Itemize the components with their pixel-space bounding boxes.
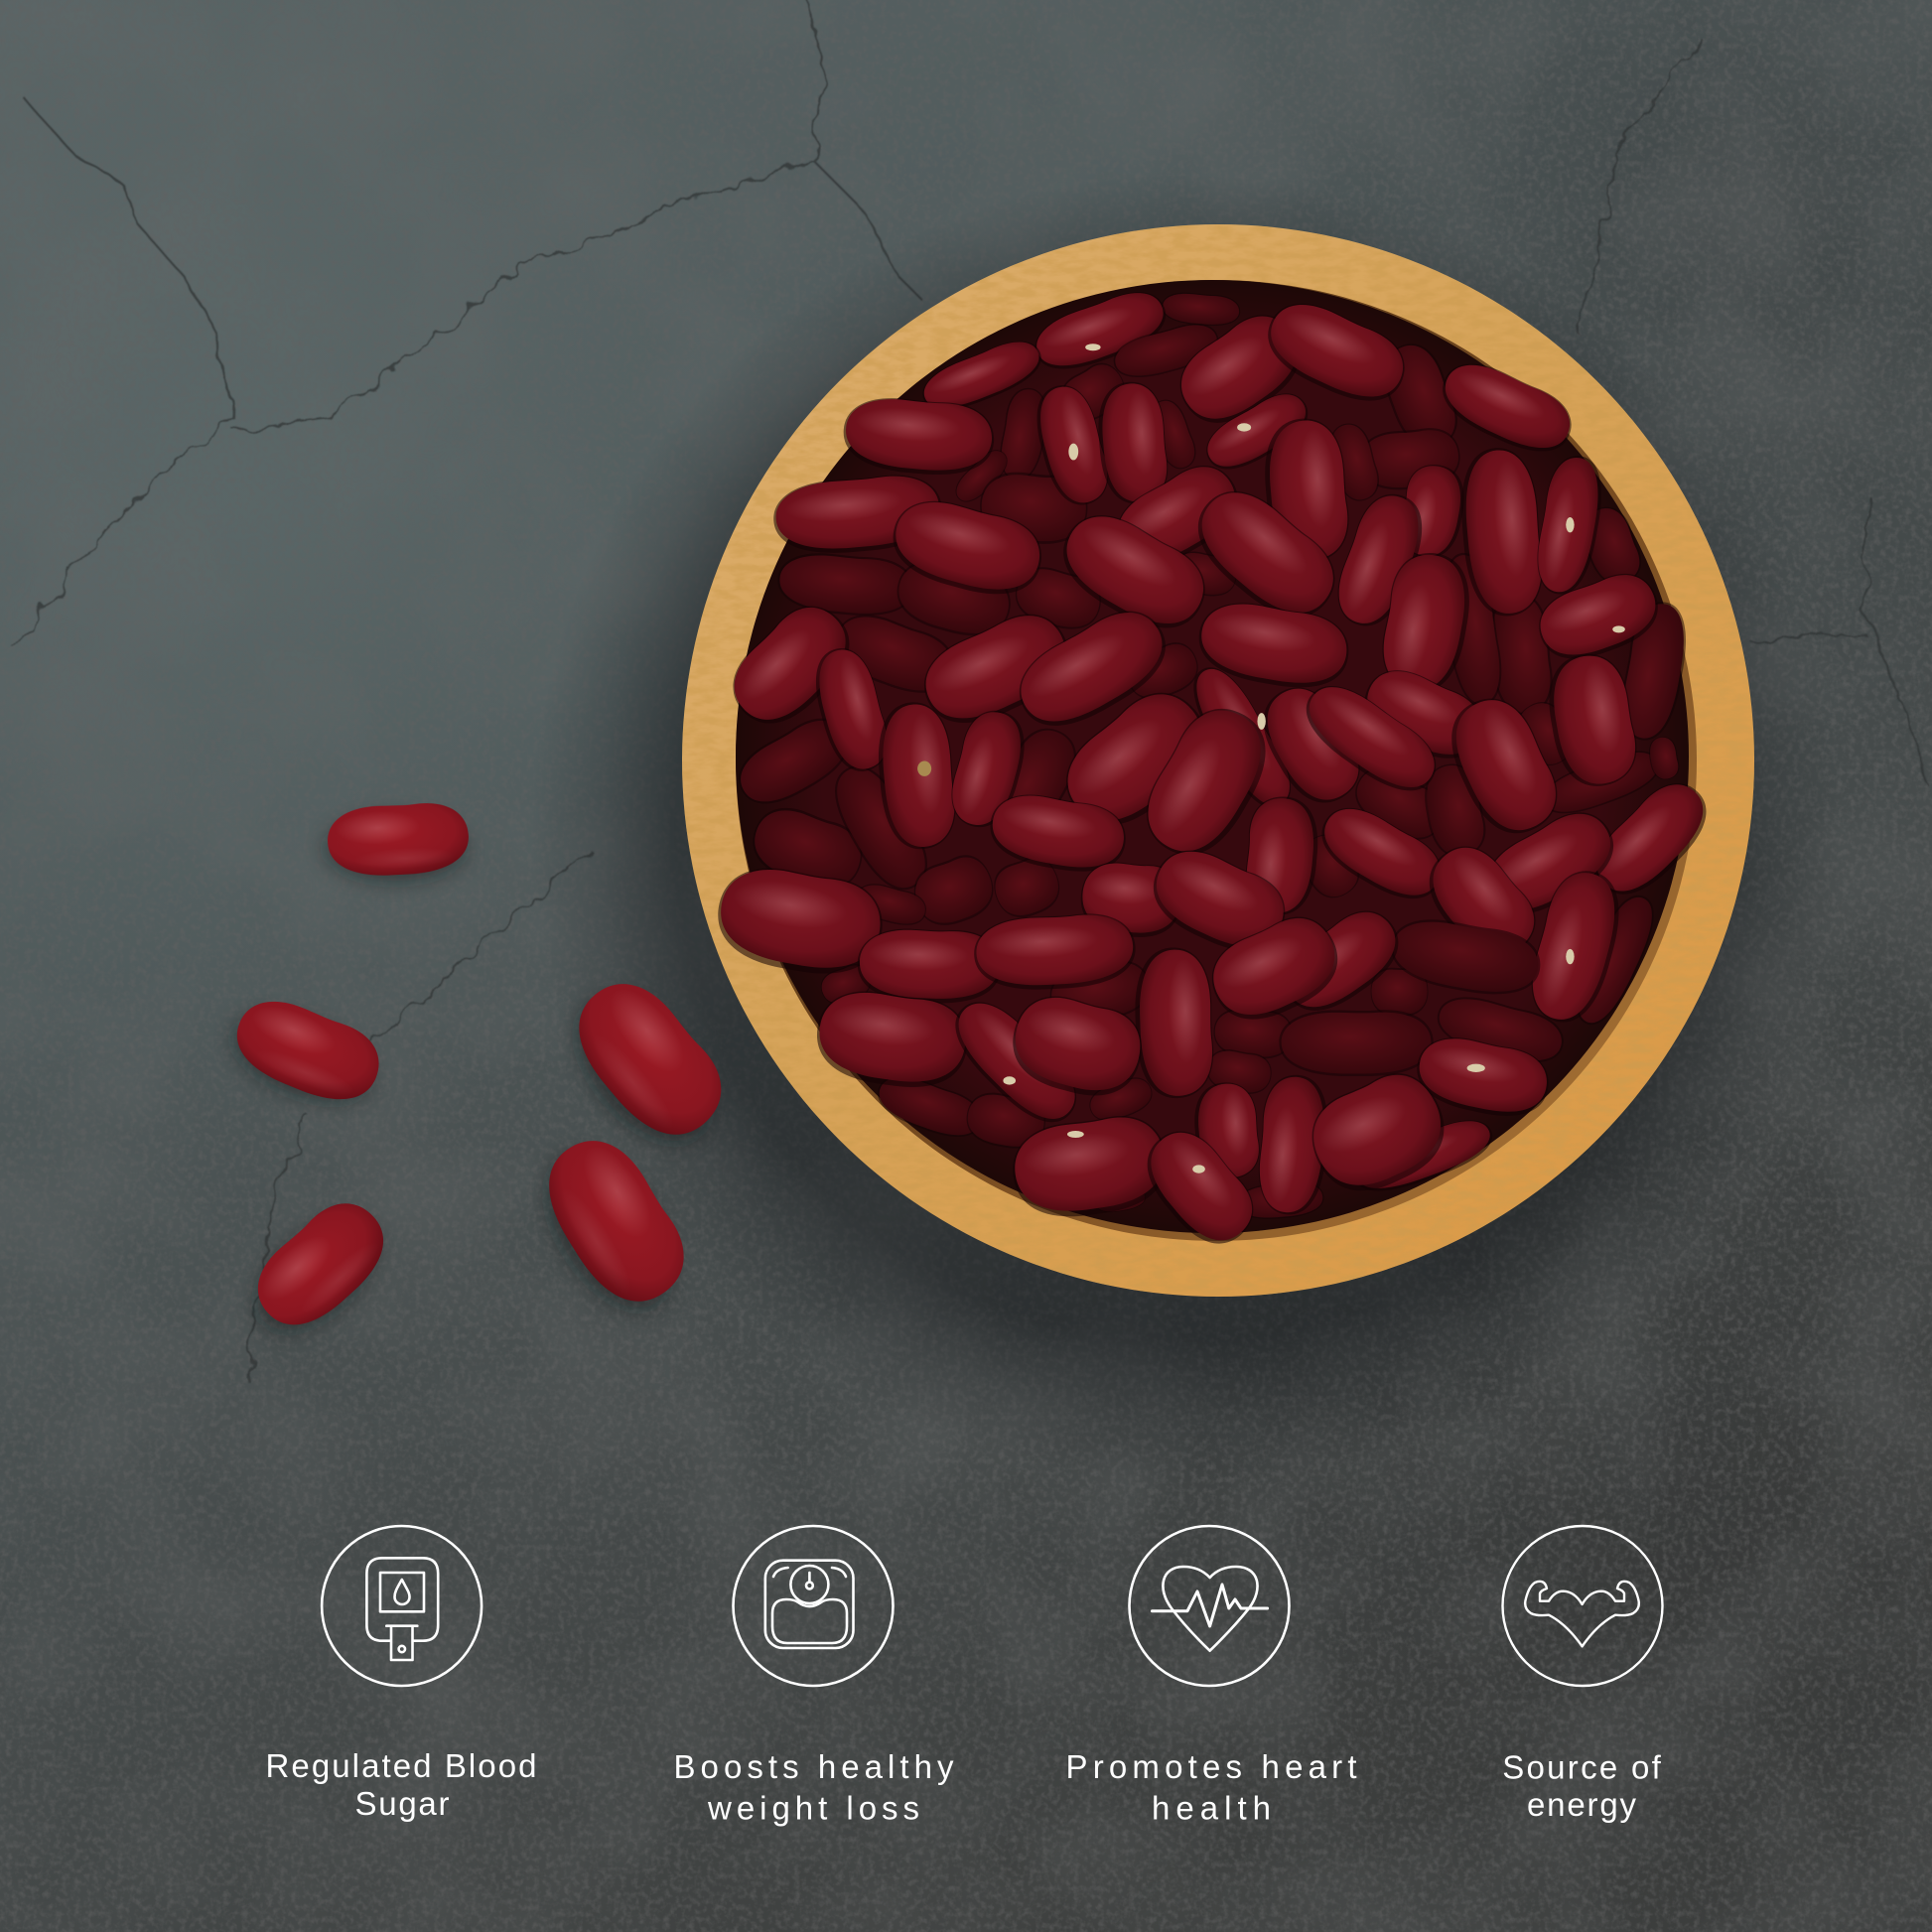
icon: weighing scale [733,1526,894,1686]
label: Boosts healthy weight loss: Boosts healthy [673,1748,954,1785]
label: Boosts healthy weight loss: weight loss [707,1789,919,1827]
rim wood grain [675,218,1767,1311]
label: Regulated Blood Sugar: Sugar [355,1785,449,1822]
benefits row [266,1526,1662,1827]
bowl cavity [736,280,1689,1233]
benefit: heart health [1066,1526,1356,1827]
loose bean 3 [557,964,740,1156]
label: Regulated Blood Sugar [266,1747,536,1822]
icon: glucose meter [322,1526,482,1686]
icon: heart with pulse [1130,1526,1289,1686]
bean hilum spots [917,344,1625,1173]
label: Source of energy [1502,1749,1662,1823]
label: Source of energy: energy [1527,1786,1636,1823]
wooden bowl [675,218,1767,1311]
loose bean 1 [326,801,471,879]
label: Source of energy: Source of [1502,1749,1662,1785]
benefit: source of energy [1502,1526,1662,1823]
loose bean 4 [527,1123,702,1320]
bowl rim [682,224,1754,1297]
benefit: regulated blood sugar [266,1526,536,1822]
label: Promotes heart health: health [1152,1789,1271,1827]
label: Boosts healthy weight loss [673,1748,954,1827]
label: Promotes heart health: Promotes heart [1066,1748,1356,1785]
label: Regulated Blood Sugar: Regulated Blood [266,1747,536,1784]
beans in bowl [710,282,1723,1260]
benefit: weight loss [673,1526,954,1827]
loose bean shadows [222,817,734,1351]
label: Promotes heart health [1066,1748,1356,1827]
loose bean 2 [224,988,390,1115]
concrete cracks [12,0,1932,1380]
icon: flexing heart [1503,1526,1662,1686]
bowl inner wall [736,280,1697,1241]
loose bean 5 [241,1187,401,1343]
loose beans on the surface [222,801,740,1351]
bowl shadow [531,174,1842,1484]
